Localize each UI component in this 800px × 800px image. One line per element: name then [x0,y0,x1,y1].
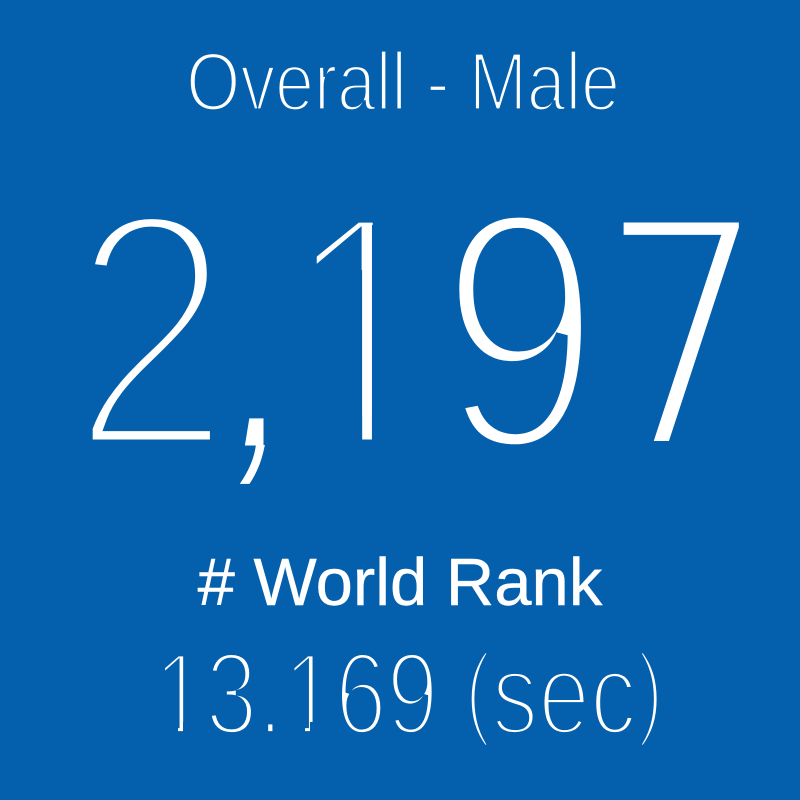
time value [154,629,664,759]
time value: 13.169 [154,629,438,759]
label: world rank: # World Rank [198,545,603,620]
time value: ( [464,632,492,748]
time value: sec [492,629,637,759]
time value: ) [637,632,664,748]
title: Overall - Male [186,36,620,128]
big number: rank value: 2,197 [71,140,768,523]
